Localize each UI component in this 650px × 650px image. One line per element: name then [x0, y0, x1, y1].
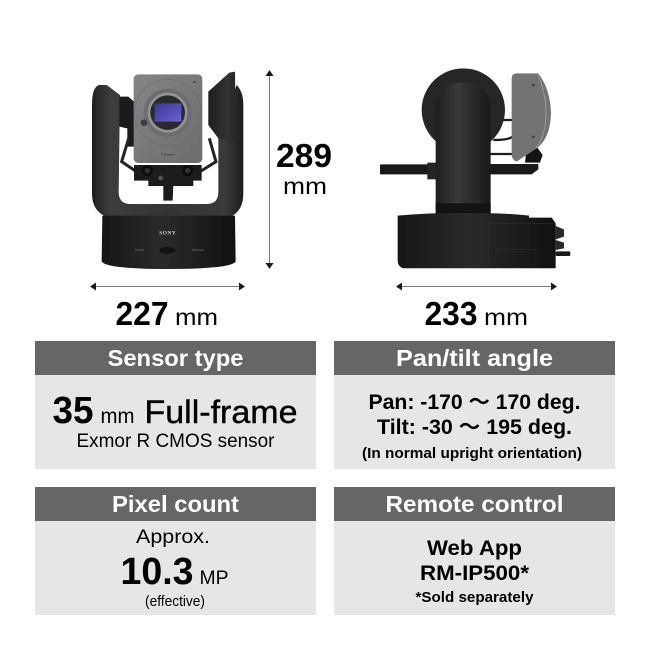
- front width label: mm: [175, 304, 218, 330]
- camera side view: [380, 68, 570, 268]
- sensor name: Exmor R CMOS sensor: [76, 431, 275, 452]
- pixel value: MP: [200, 568, 228, 589]
- lower cradle bracket: [122, 138, 216, 201]
- pixel value: 10.3: [120, 551, 194, 593]
- base controls: NETWORK: [192, 250, 204, 252]
- web app: Web App: [427, 537, 522, 560]
- height label: [276, 137, 332, 199]
- sensor size: mm: [100, 405, 134, 428]
- heading: pan/tilt angle: Pan/tilt angle: [396, 345, 553, 371]
- heading: pixel count: Pixel count: [112, 491, 239, 517]
- dimension arrow: side width: [396, 282, 557, 290]
- camera body: Full-frame: [161, 153, 175, 157]
- tilt range: Tilt: -30 ～ 195 deg.: [377, 416, 572, 439]
- camera body: [134, 74, 202, 163]
- pan base: [102, 216, 236, 269]
- pan base side: [398, 213, 570, 268]
- approx label: Approx.: [136, 527, 210, 548]
- sensor size: [52, 390, 298, 432]
- pan range: Pan: -170 ～ 170 deg.: [368, 391, 580, 414]
- heading: remote control: Remote control: [386, 491, 564, 517]
- sensor size: Full-frame: [144, 394, 298, 430]
- rear brackets and rod: [380, 120, 543, 179]
- panel: pixel count: [35, 487, 316, 615]
- remote model: RM-IP500*: [420, 562, 530, 585]
- base controls: [135, 247, 204, 254]
- right tilt pod: [208, 72, 236, 143]
- front width label: 227: [116, 295, 168, 332]
- pixel value: [120, 551, 228, 593]
- tilt disc: [422, 68, 505, 152]
- panel: pan/tilt angle: [334, 341, 615, 469]
- tilt pillar: [436, 83, 491, 218]
- effective note: (effective): [145, 593, 205, 610]
- sold separately note: *Sold separately: [416, 589, 534, 606]
- front width label: [116, 295, 218, 332]
- left tilt pod: [119, 97, 134, 147]
- panel: sensor type: [35, 341, 316, 469]
- camera body: α: [193, 79, 196, 84]
- side width label: mm: [484, 304, 528, 330]
- base controls: POWER: [135, 250, 144, 252]
- logo: SONY: [159, 231, 176, 237]
- camera side: [512, 73, 551, 162]
- side width label: 233: [424, 295, 478, 332]
- height label: mm: [283, 173, 327, 199]
- camera arms: [92, 85, 243, 217]
- camera front view: [92, 72, 243, 269]
- panel: remote control: [334, 487, 615, 615]
- dimension arrow: height: [266, 70, 274, 269]
- dimension arrow: front width: [90, 282, 245, 290]
- heading: sensor type: Sensor type: [108, 345, 244, 371]
- side width label: [424, 295, 528, 332]
- sensor size: 35: [52, 390, 94, 432]
- height label: 289: [276, 137, 332, 174]
- orientation note: (In normal upright orientation): [362, 445, 582, 462]
